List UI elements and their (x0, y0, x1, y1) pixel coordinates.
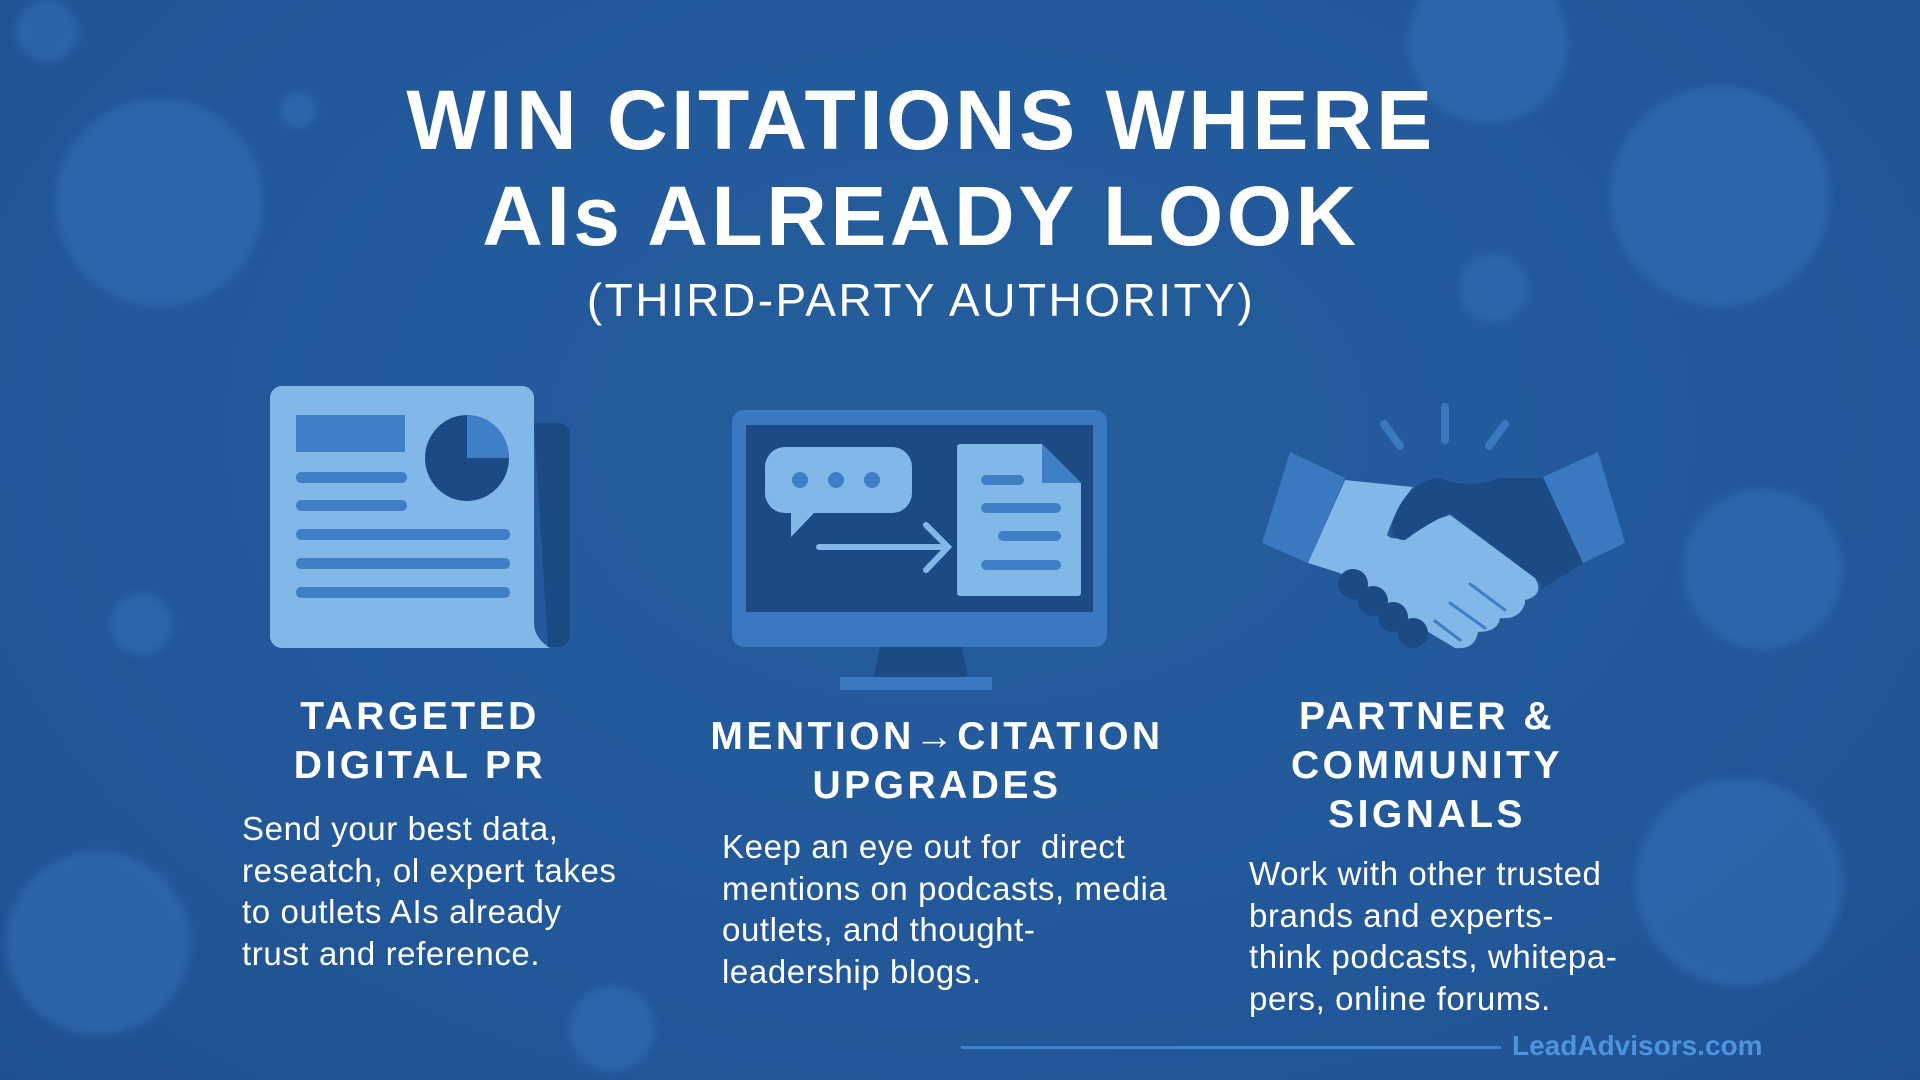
heading: mention to citation: MENTION→CITATION (710, 715, 1164, 758)
footer line (961, 1046, 1501, 1049)
text: col 2 (722, 828, 1167, 990)
text: col 1 (242, 810, 617, 972)
footer brand: LeadAdvisors.com (1512, 1030, 1763, 1061)
heading: partner & community: SIGNALS (1328, 793, 1526, 836)
text: col 1: trust and reference. (242, 934, 540, 972)
text: col 2: mentions on podcasts, media (722, 870, 1167, 906)
text: col 1: reseatch, ol expert takes (242, 852, 617, 888)
text: col 1: Send your best data, (242, 810, 559, 847)
text: col 3 (1249, 855, 1617, 1017)
heading: partner & community (1291, 695, 1563, 836)
text: col 3: brands and experts- (1249, 896, 1554, 934)
heading: targeted digital PR: DIGITAL PR (294, 744, 546, 787)
text: col 2: Keep an eye out for direct (722, 828, 1125, 865)
icon: document report (270, 386, 570, 648)
heading: partner & community: PARTNER & (1299, 695, 1555, 738)
title: AIs ALREADY LOOK (482, 169, 1360, 263)
heading: targeted digital PR: TARGETED (300, 695, 540, 738)
text: col 3: think podcasts, whitepa- (1249, 938, 1617, 975)
icon: monitor with chat to document (732, 410, 1107, 690)
text: col 3: pers, online forums. (1249, 980, 1551, 1016)
heading: partner & community: COMMUNITY (1291, 744, 1563, 787)
icon: handshake (1262, 403, 1625, 648)
text: col 1: to outlets AIs already (242, 893, 562, 930)
heading: mention to citation: UPGRADES (812, 764, 1062, 807)
text: col 2: leadership blogs. (722, 952, 982, 990)
text: col 2: outlets, and thought- (722, 911, 1035, 948)
title: WIN CITATIONS WHERE (406, 73, 1436, 167)
heading: mention to citation (710, 715, 1164, 807)
heading: targeted digital PR (294, 695, 546, 787)
title (406, 73, 1436, 263)
subtitle: (THIRD-PARTY AUTHORITY) (587, 274, 1255, 326)
text: col 3: Work with other trusted (1249, 855, 1602, 892)
